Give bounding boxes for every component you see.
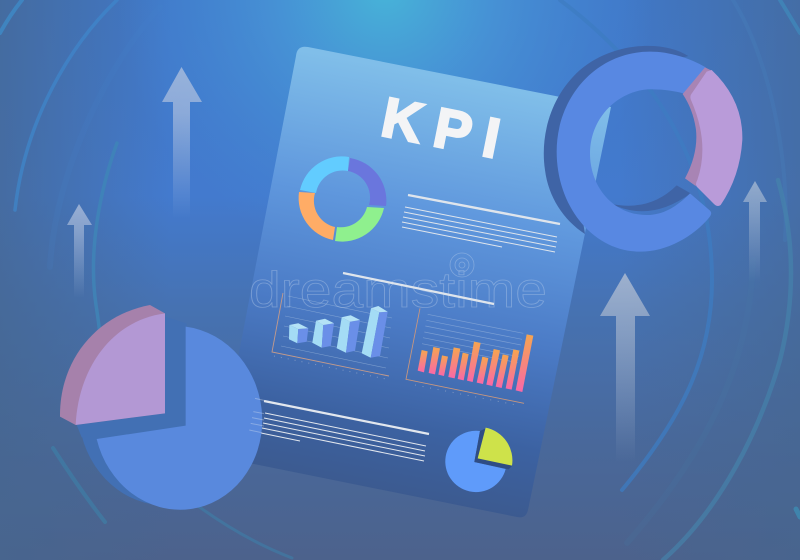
arrow: up, left small bbox=[67, 204, 92, 298]
donut pink face bbox=[690, 70, 742, 206]
donut chart: large 3D bbox=[544, 46, 742, 252]
watermark spiral bbox=[450, 253, 474, 277]
pie main slice bbox=[97, 327, 262, 510]
text block: bottom lines bbox=[261, 401, 429, 461]
arrow: up, right large bbox=[600, 273, 650, 462]
watermark bbox=[249, 253, 547, 318]
pie side wall bbox=[82, 323, 246, 505]
panel: KPI document bbox=[219, 47, 611, 517]
bar chart: 3D blue bars bbox=[272, 293, 392, 379]
pie detached slice side bbox=[60, 305, 165, 425]
bar chart: orange gradient bars bbox=[406, 308, 533, 405]
pie detached slice face bbox=[76, 313, 165, 425]
text block: middle heading line bbox=[343, 273, 494, 304]
arrow: up, right small bbox=[743, 181, 767, 282]
pie chart: small bbox=[445, 428, 512, 492]
donut blue ring bbox=[557, 52, 711, 252]
arrow: up, top left bbox=[162, 67, 202, 218]
text block: top lines bbox=[402, 195, 560, 252]
pie chart: large 3D bbox=[60, 305, 264, 510]
donut pink inner wall bbox=[683, 67, 712, 186]
donut back wall bbox=[544, 46, 688, 234]
donut chart bbox=[299, 156, 386, 242]
title: KPI: KPI bbox=[377, 85, 518, 172]
watermark text: dreamstime bbox=[249, 262, 547, 318]
